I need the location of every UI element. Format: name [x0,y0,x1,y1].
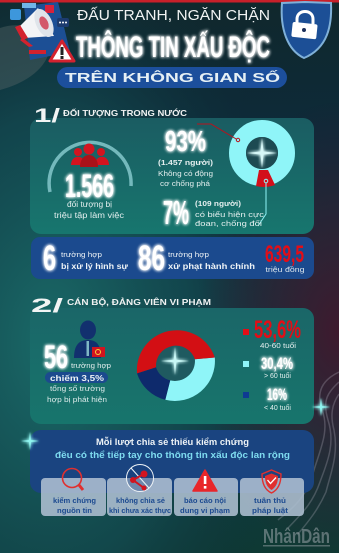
stat: 86: 86 [138,239,165,278]
arc around people [49,142,131,192]
section 1 number: 1/ [34,106,61,127]
card: obey the law: pháp luật [252,506,289,515]
caption: 7%: (109 người) [195,199,242,208]
legend: 30,4%: 30,4% [261,355,293,373]
decorative wave right [278,372,339,534]
caption: 93%: (1.457 người) [158,158,214,167]
caption: 1.566 [54,200,124,220]
caption: 56: trường hợp [71,361,111,370]
icon: people [71,144,109,167]
icon: sparkle [312,398,330,416]
card: obey the law: tuân thủ [254,496,286,505]
icon: shield with lock [282,2,331,58]
caption: 639,5: triệu đồng [266,265,304,274]
card: verify sources: kiểm chứng [53,496,96,505]
stat: 56: 56 [44,339,68,375]
stat: 639,5: 639,5 [265,241,304,268]
legend: 16%: < 40 tuổi [264,404,291,412]
red leader line [197,124,240,142]
message line 2: đều có thể tiếp tay cho thông tin xấu độc lan rộng [55,450,290,460]
icon: sparkle left [21,432,39,450]
card: do not share: khi chưa xác thực [109,506,171,515]
caption: share: tổng số trường [50,384,105,393]
stat: 93%: 93% [165,126,206,158]
caption: 93%: cơ chống phá [160,179,211,188]
caption: 1.566: triệu tập làm việc [54,211,124,220]
pill: 3.5 percent: chiếm 3,5% [50,373,105,383]
panel 2: officials and party members [30,308,314,424]
card: verify sources: nguồn tin [57,506,92,515]
card: report violations: dung vi phạm [180,506,230,515]
panel: handling results [31,237,314,279]
caption: 6: trường hợp [61,250,102,259]
legend: 53,6%: 40-60 tuổi [260,342,297,350]
cyan leader line [258,179,268,226]
caption: 7%: đoan, chống đối [195,219,262,228]
title pill: TRÊN KHÔNG GIAN SỐ [65,70,280,85]
caption: share: hợp bị phát hiện [47,395,107,404]
section 1 heading: ĐỐI TƯỢNG TRONG NƯỚC [63,107,187,118]
icon: phone and megaphone [10,2,70,60]
title line 1: ĐẤU TRANH, NGĂN CHẶN [77,7,270,24]
caption: 6 [61,250,129,271]
card: do not share [107,464,172,516]
caption: 93%: Không có động [158,169,213,178]
legend: 30,4%: > 60 tuổi [264,372,291,380]
icon: person with party flag [74,320,105,358]
caption: share [47,384,107,404]
donut chart 1 [238,128,286,187]
icon: warning triangle [50,41,74,61]
caption: 86: trường hợp [168,250,209,259]
stat: 1.566: 1.566 [65,168,114,204]
stat: 6: 6 [43,239,56,278]
stat: 7%: 7% [163,194,189,231]
legend: 30,4% [243,355,293,380]
caption: 7% [195,199,264,228]
caption: 6: bị xử lý hình sự [61,261,129,271]
card: report violations: báo cáo nội [184,496,226,505]
panel 1: domestic subjects [30,118,314,234]
caption: 1.566: đối tượng bị [67,200,112,209]
caption: 7%: có biểu hiện cực [195,210,264,219]
message line 1: Mỗi lượt chia sẻ thiếu kiểm chứng [96,437,249,447]
caption: 86 [168,250,255,271]
donut chart 2 [137,330,215,401]
section 2 number: 2/ [31,296,64,317]
title pill [57,67,287,88]
legend: 53,6%: 53,6% [254,316,301,344]
section 2 heading: CÁN BỘ, ĐẢNG VIÊN VI PHẠM [67,296,211,307]
card: obey the law [240,470,304,516]
card: verify sources [41,468,106,516]
caption: 86: xử phạt hành chính [168,261,255,271]
caption: 93% [158,158,214,188]
card: do not share: không chia sẻ [116,496,165,505]
legend: 53,6% [243,316,301,350]
legend: 16% [243,386,291,412]
panel: call to action [30,430,314,493]
pill: 3.5 percent [45,372,108,383]
card: report violations [174,470,238,516]
legend: 16%: 16% [267,386,287,404]
top red bar [0,0,339,2]
